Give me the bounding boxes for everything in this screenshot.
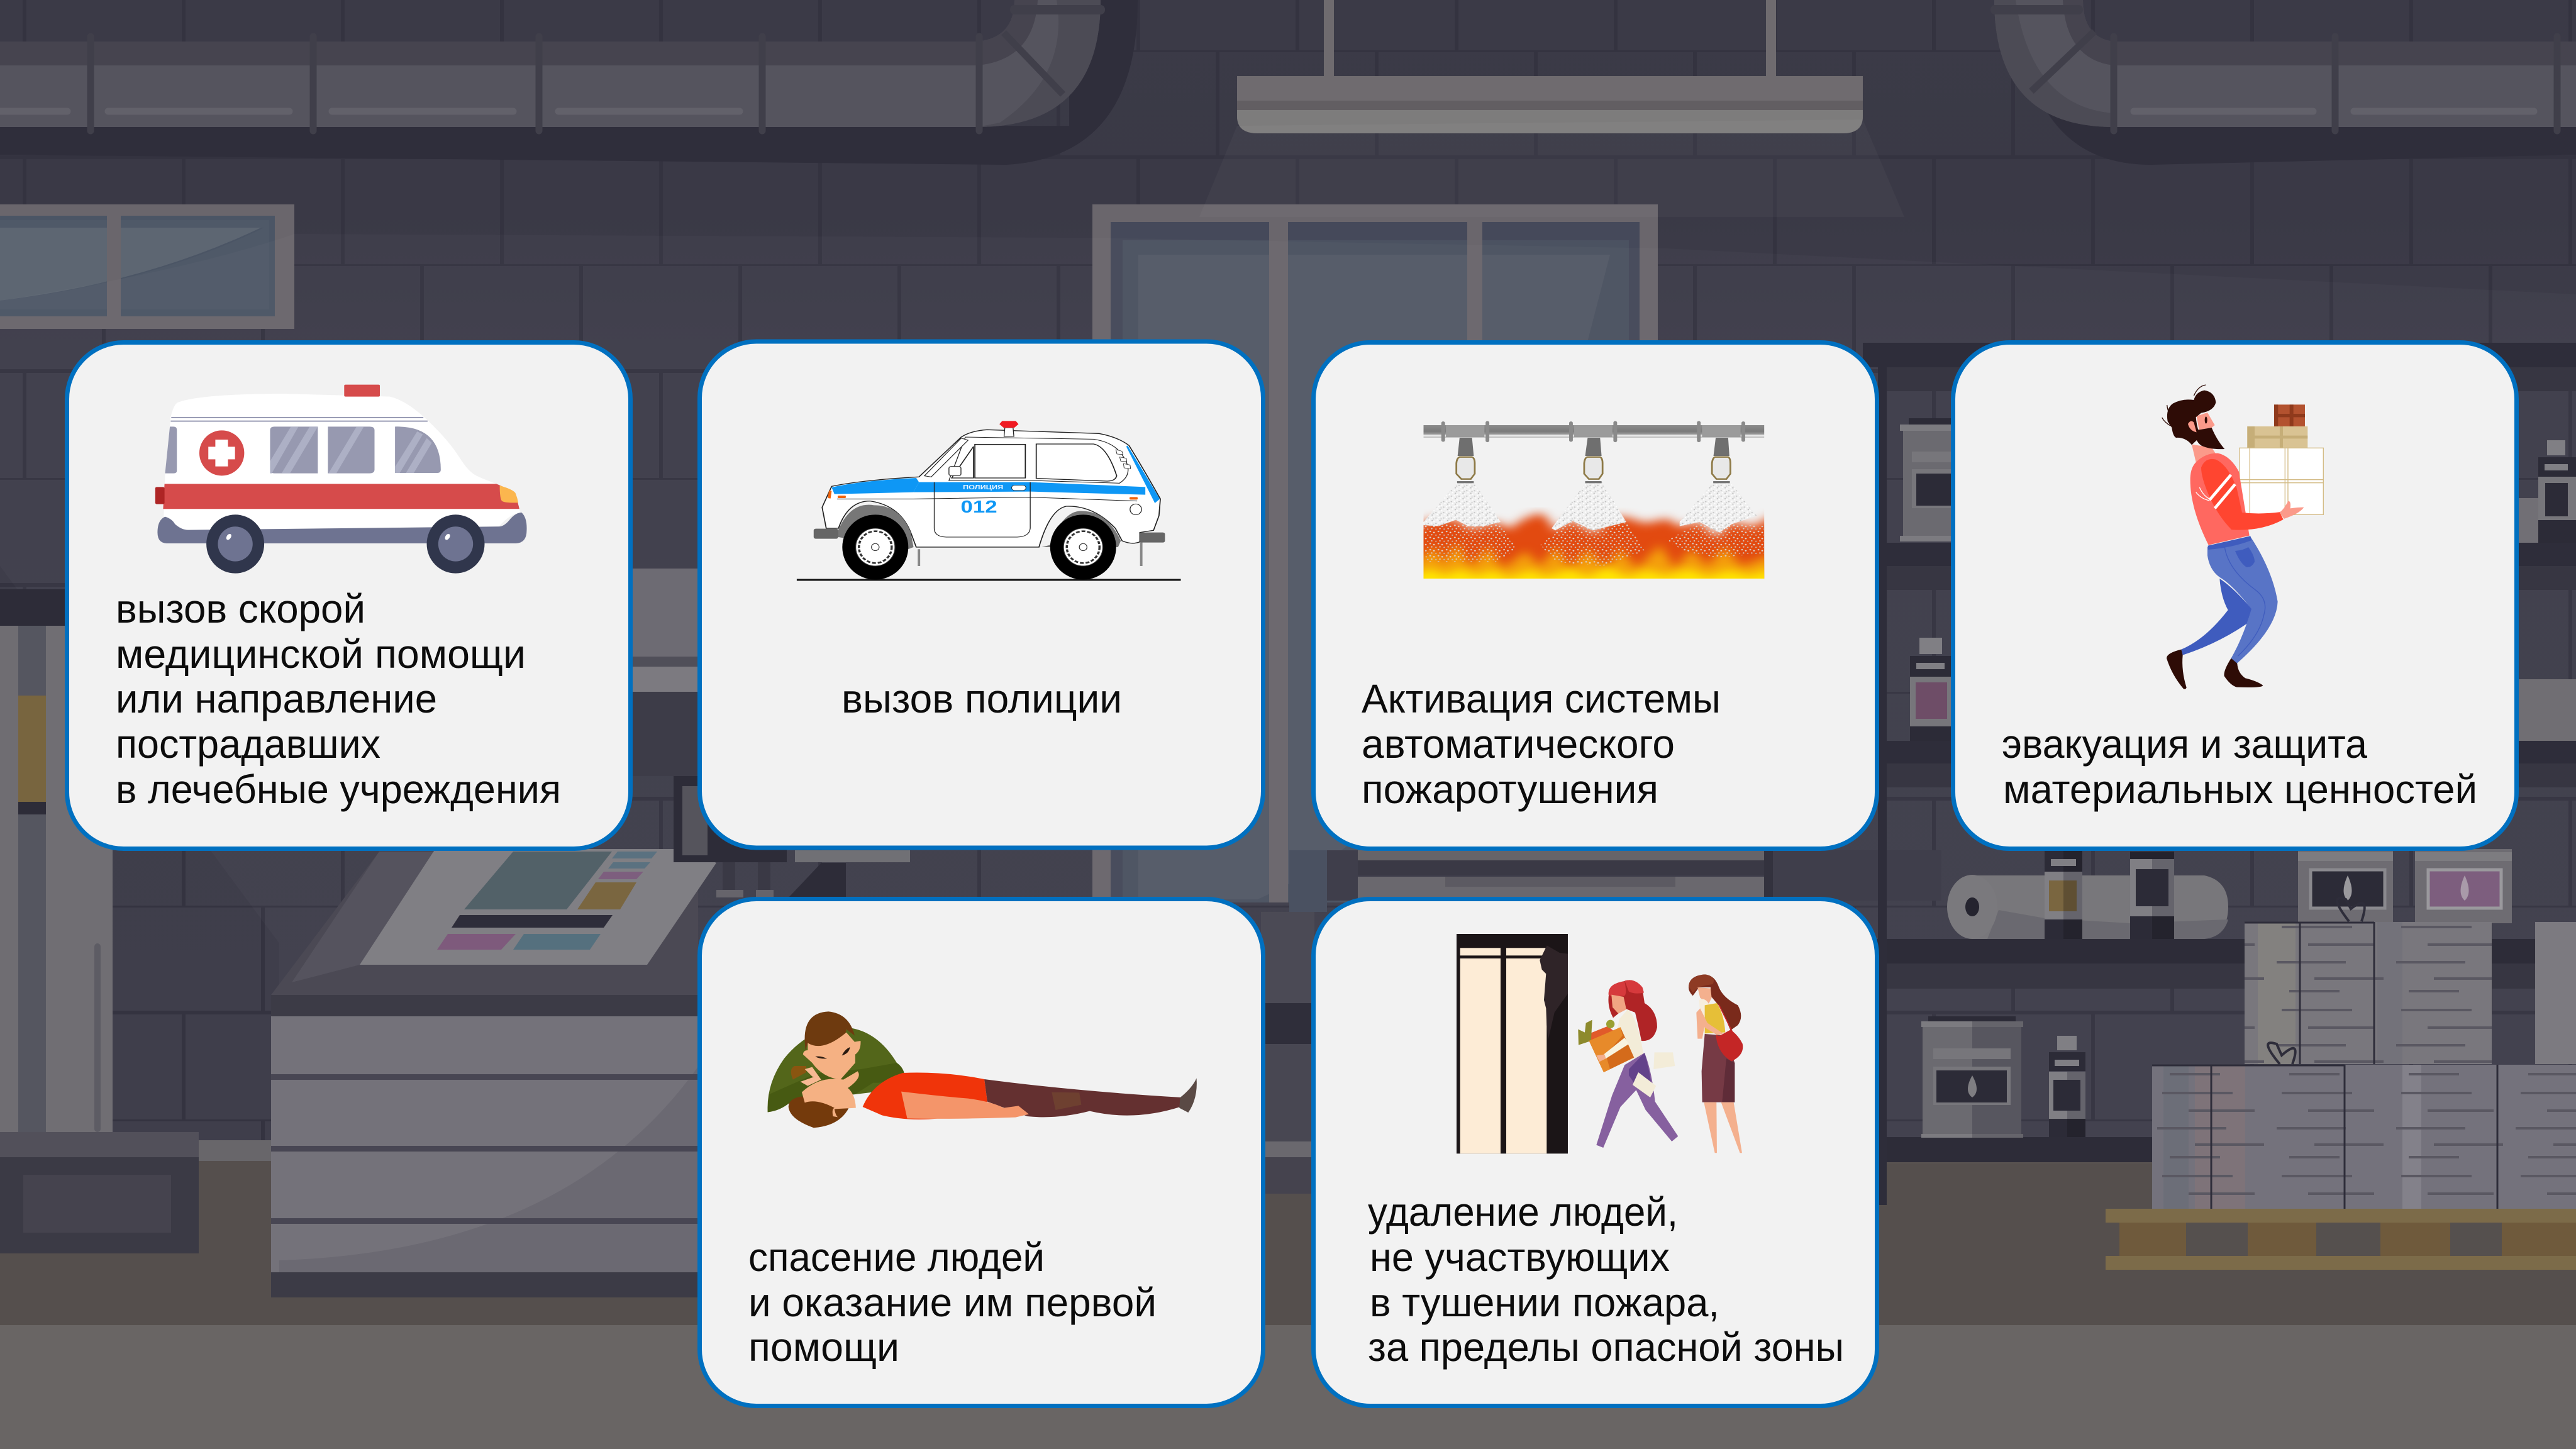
gray machine behind cards — [632, 569, 698, 776]
ink cans on shelf — [2298, 849, 2512, 923]
central window — [1092, 204, 1658, 902]
text: ambulance call: медицинской помощи — [116, 631, 526, 677]
shelving — [1863, 343, 2576, 1205]
icon: police car: 012 — [961, 497, 997, 516]
text: ambulance call: пострадавших — [116, 721, 380, 767]
left column — [0, 589, 113, 1132]
left window — [0, 204, 294, 329]
left duct pipe — [0, 0, 1105, 131]
wooden pallet — [2106, 1209, 2576, 1270]
card 5: first aid — [699, 899, 1263, 1406]
text: removal of bystanders: в тушении пожара, — [1370, 1280, 1719, 1325]
text: sprinkler activation: автоматического — [1362, 721, 1675, 767]
text: rescue and first aid: и оказание им первой — [748, 1280, 1157, 1325]
card 4: evacuation of property — [1953, 342, 2517, 849]
icon: door and two women leaving — [1457, 934, 1742, 1153]
text: removal of bystanders: за пределы опасной зоны — [1368, 1324, 1844, 1370]
text: rescue and first aid: помощи — [748, 1324, 899, 1370]
text: ambulance call: вызов скорой — [116, 586, 365, 631]
printing press desk — [271, 849, 716, 1297]
right duct pipe — [1990, 0, 2576, 131]
card 2: police — [699, 341, 1263, 848]
icon: man carrying boxes — [2162, 385, 2323, 689]
ceiling lamp — [1237, 0, 1863, 133]
icon: police car: ПОЛИЦИЯ — [963, 484, 1003, 491]
machine under window — [1289, 850, 1941, 912]
icon: police car — [797, 421, 1181, 580]
text: ambulance call: в лечебные учреждения — [116, 767, 561, 812]
text: police call: вызов полиции — [841, 676, 1122, 721]
icon: fire sprinkler system — [1414, 423, 1774, 587]
column between lower cards — [1261, 912, 1314, 1194]
text: rescue and first aid: спасение людей — [748, 1235, 1045, 1280]
ink can and bottle lower — [1921, 1016, 2085, 1138]
light pool — [0, 234, 2576, 1260]
paper roll and bottles — [1947, 851, 2228, 939]
paper stacks — [2152, 898, 2576, 1209]
text: removal of bystanders: удаление людей, — [1368, 1189, 1678, 1235]
text: evacuation of valuables: материальных ценностей — [2003, 767, 2477, 812]
card 3: sprinklers — [1313, 342, 1877, 849]
shelf can and bottles upper — [1900, 418, 2576, 741]
card 1: ambulance — [67, 342, 630, 849]
icon: ambulance — [155, 385, 527, 574]
text: removal of bystanders: не участвующих — [1370, 1235, 1670, 1280]
card 6: removal of people — [1313, 899, 1877, 1406]
text: evacuation of valuables: эвакуация и защита — [2002, 721, 2367, 767]
pipe shadow — [0, 0, 2576, 165]
floor box — [0, 1132, 199, 1253]
icon: rescue breathing — [767, 1011, 1197, 1128]
monitor — [674, 776, 910, 897]
text: sprinkler activation: Активация системы — [1362, 676, 1721, 721]
text: sprinkler activation: пожаротушения — [1362, 767, 1658, 812]
text: ambulance call: или направление — [116, 676, 437, 721]
floor — [0, 1140, 2576, 1449]
